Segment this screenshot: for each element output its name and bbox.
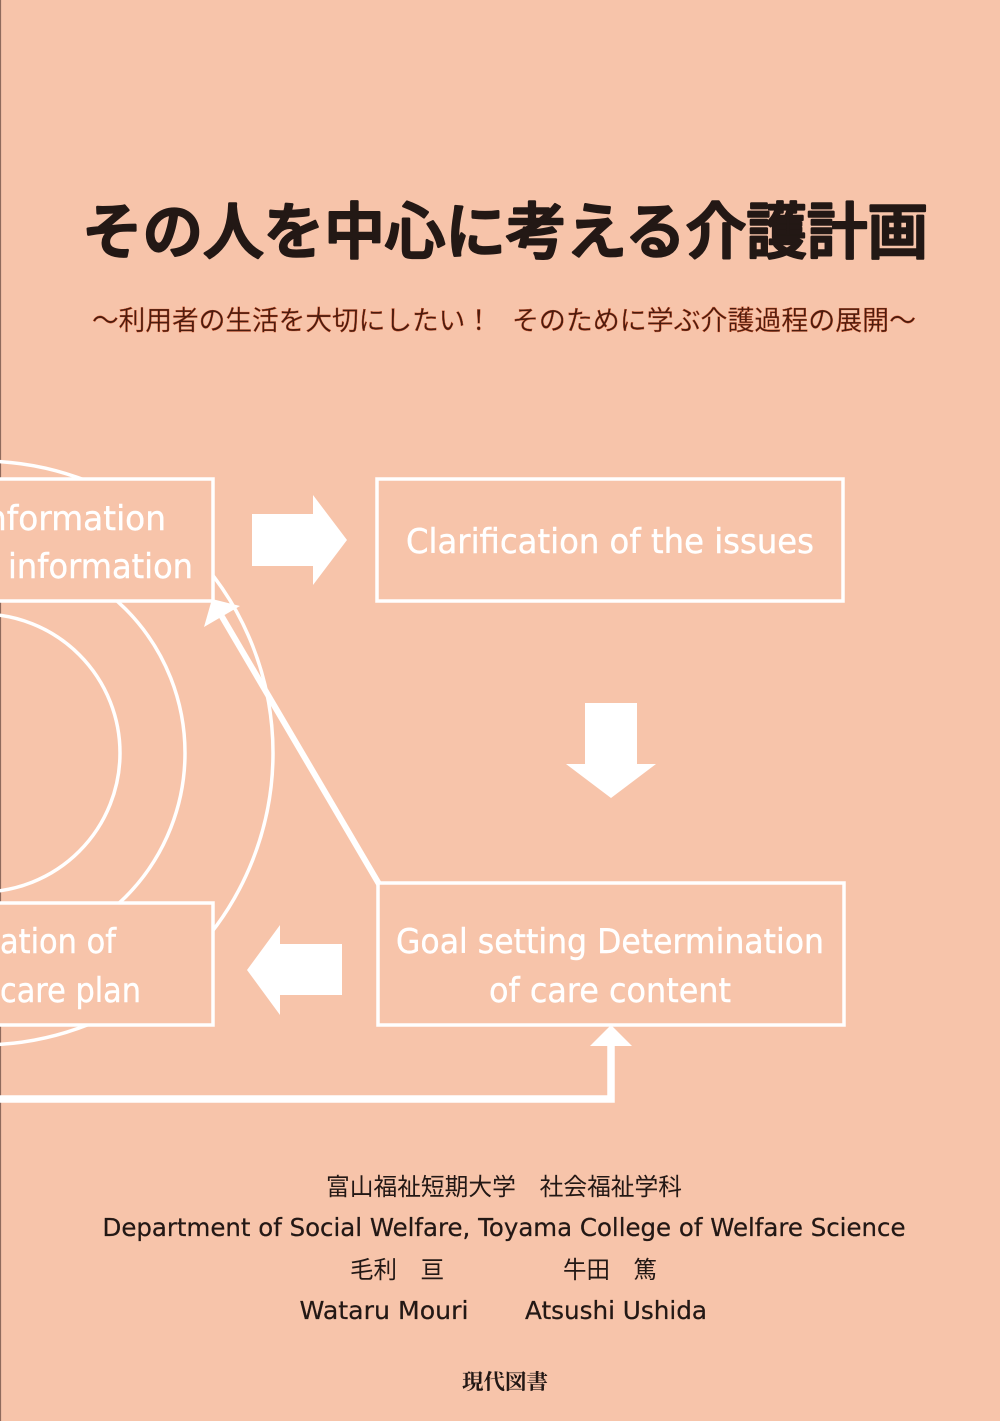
subtitle part two: そのために学ぶ介護過程の展開～ (512, 299, 916, 338)
arrow: feedback to information (204, 599, 379, 884)
arrow: evaluation to goal setting (0, 1025, 632, 1099)
box: implementation of care plan (0, 903, 213, 1025)
box: goal setting: Goal setting Determination (396, 922, 824, 962)
box: implementation of care plan: ation of (0, 922, 117, 962)
affiliation english: Department of Social Welfare, Toyama College of Welfare Science (102, 1213, 906, 1242)
title: その人を中心に考える介護計画 (82, 182, 928, 271)
box: information (0, 479, 213, 601)
box: clarification of the issues (377, 479, 843, 601)
arrow: left (247, 925, 342, 1015)
author name japanese 2: 牛田 篤 (563, 1250, 657, 1285)
arrow: down (566, 703, 656, 798)
box: goal setting: of care content (489, 971, 731, 1011)
box: goal setting (378, 883, 844, 1025)
concentric circles (0, 461, 273, 1045)
affiliation japanese: 富山福祉短期大学 社会福祉学科 (326, 1167, 682, 1202)
author name english 2: Atsushi Ushida (525, 1296, 707, 1325)
subtitle (92, 299, 916, 338)
box: information: information (8, 547, 193, 587)
cycle diagram (0, 461, 844, 1099)
box: clarification of the issues: Clarification of the issues (406, 522, 814, 562)
box: implementation of care plan: care plan (0, 971, 141, 1011)
page spine line (0, 0, 2, 1421)
author name japanese 1: 毛利 亘 (350, 1250, 444, 1285)
arrow: right (252, 495, 347, 585)
author name english 1: Wataru Mouri (300, 1296, 468, 1325)
subtitle part one: ～利用者の生活を大切にしたい！ (92, 299, 492, 338)
publisher: 現代図書 (462, 1366, 548, 1396)
